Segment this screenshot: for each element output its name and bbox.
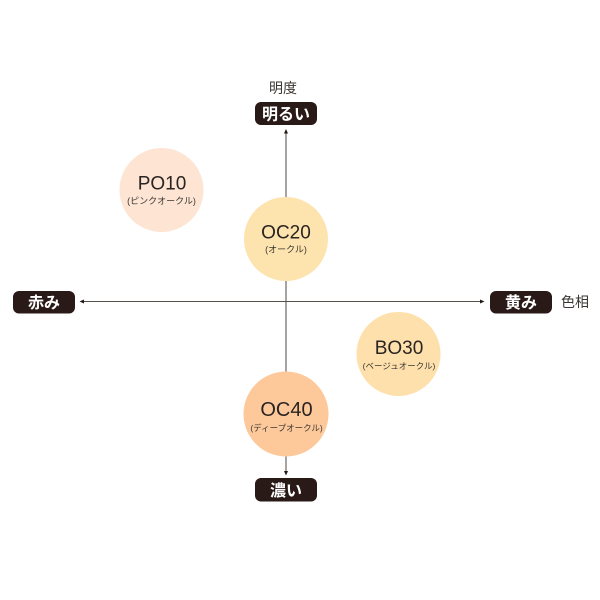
swatch: OC40: (ディープオークル) — [250, 423, 323, 433]
swatch: OC20: OC20 — [261, 222, 311, 244]
pill: 明るい: 明るい — [262, 106, 310, 124]
pill: 濃い — [255, 478, 317, 502]
swatch: PO10 — [120, 148, 204, 232]
swatch: BO30 — [356, 312, 440, 396]
swatch: PO10: (ピンクオークル) — [127, 196, 196, 206]
pill: 赤み — [13, 291, 75, 314]
pill: 明るい — [255, 102, 317, 125]
axis label: 色相: 色相 — [561, 294, 589, 310]
vertical axis arrow — [284, 129, 288, 476]
horizontal axis arrow — [80, 300, 484, 304]
swatch: OC20: (オークル) — [265, 244, 307, 254]
pill: 赤み: 赤み — [28, 294, 60, 312]
swatch: BO30: (ベージュオークル) — [363, 361, 435, 371]
pill: 黄み — [490, 291, 552, 314]
swatch: OC40 — [244, 372, 328, 456]
swatch: PO10: PO10 — [138, 174, 186, 194]
swatch: OC40: OC40 — [260, 399, 313, 421]
pill: 濃い: 濃い — [270, 482, 302, 500]
axis label: 明度: 明度 — [269, 80, 297, 96]
swatch: OC20 — [244, 197, 328, 281]
swatch: BO30: BO30 — [375, 338, 423, 359]
pill: 黄み: 黄み — [505, 294, 537, 312]
